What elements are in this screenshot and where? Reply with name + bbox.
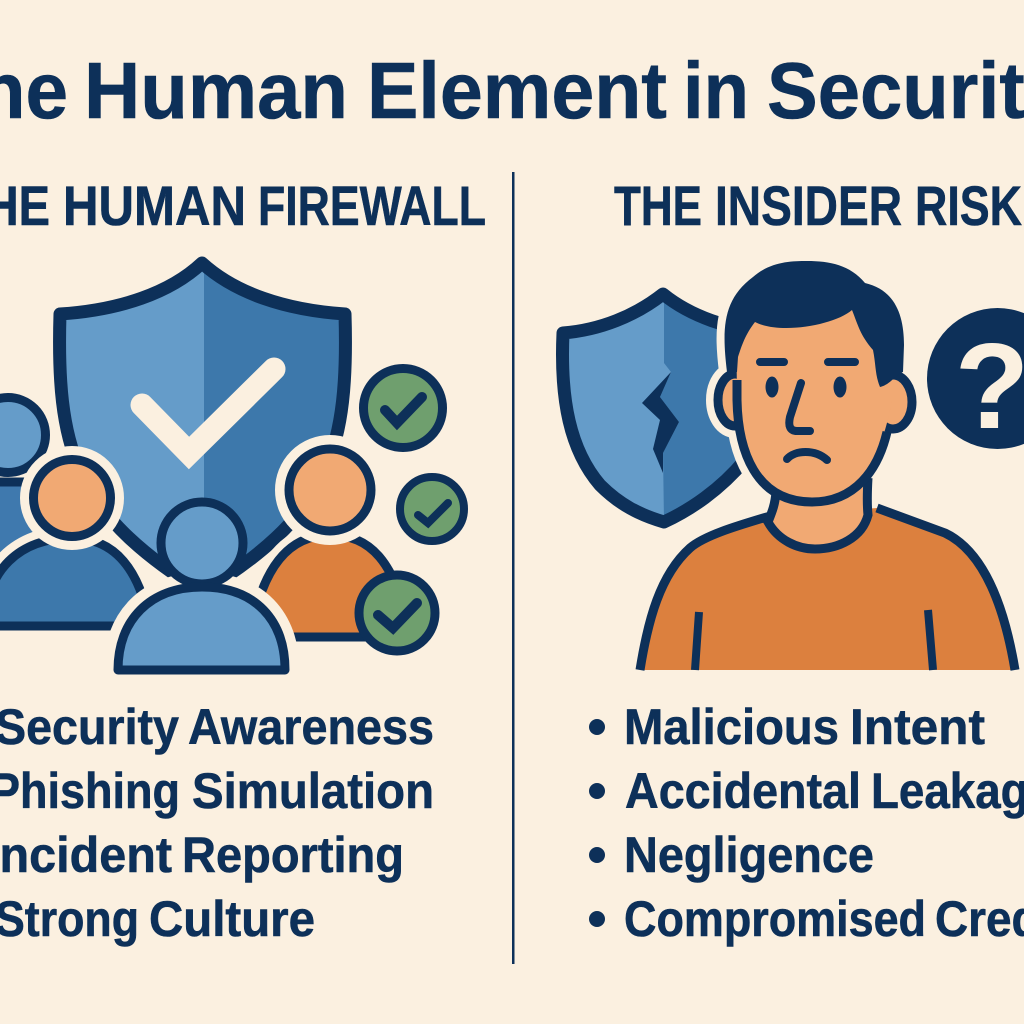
icon: person far left	[0, 398, 60, 560]
right heading: THE	[614, 174, 702, 237]
right bullet list: Accidental	[625, 763, 861, 819]
right bullet list: Intent	[850, 699, 985, 755]
title: in	[683, 46, 749, 135]
left bullet list	[0, 699, 434, 947]
title	[0, 46, 1024, 135]
icon: green check badge top	[364, 368, 442, 448]
left bullet list: Simulation	[192, 763, 434, 819]
left heading: FIREWALL	[258, 174, 486, 237]
right heading	[614, 174, 1022, 237]
left bullet list: Reporting	[182, 827, 404, 883]
left heading: HUMAN	[63, 174, 246, 237]
right bullet list	[589, 699, 1024, 947]
title: Human	[84, 46, 348, 135]
icon: large shield with check	[60, 263, 345, 592]
icon: cracked shield	[562, 294, 770, 522]
icon: green check badge bottom	[359, 575, 435, 651]
title: Element	[367, 46, 667, 135]
right bullet list: Compromised	[624, 891, 926, 947]
icon: person left	[0, 451, 150, 626]
icon: person right	[250, 440, 412, 637]
right bullet list: Malicious	[624, 699, 839, 755]
icon: green check badge middle	[400, 477, 464, 541]
right heading: INSIDER	[715, 174, 902, 237]
icon: person center	[118, 502, 285, 670]
icon: worried person	[640, 261, 1015, 670]
left heading	[0, 174, 486, 237]
icon: question mark bubble	[927, 308, 1024, 454]
left bullet list: Security	[0, 699, 179, 755]
right bullet list: Negligence	[624, 827, 874, 883]
left bullet list: Awareness	[188, 699, 434, 755]
left bullet list: Culture	[149, 891, 315, 947]
